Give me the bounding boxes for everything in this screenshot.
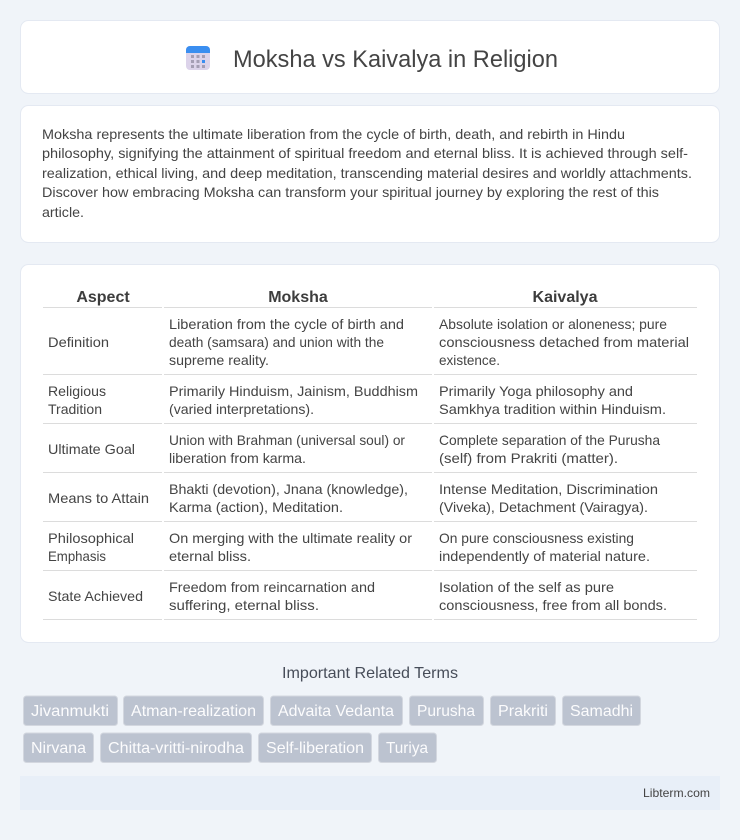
text block: introduction paragraph: Moksha represents the ultimate liberation from the cycle of birth, death, and rebirth in Hindu [42,126,625,142]
table header [76,289,598,306]
row: definition: Absolute isolation or aloneness; pure [439,316,667,332]
row: means to attain: Intense Meditation, Discrimination [439,481,658,497]
related term chips: Jivanmukti [31,703,109,720]
text block: introduction paragraph: realization, ethical living, and deep meditation, transcending material desires and worldly attachments. [42,165,692,181]
row: definition: Definition [48,334,109,350]
table header: Moksha [268,289,328,306]
text block: introduction paragraph: philosophy, signifying the attainment of spiritual freedom and eternal bliss. It is achieved through self- [42,145,688,161]
row: ultimate goal: liberation from karma. [169,450,306,466]
row: philosophical emphasis: On pure consciousness existing [439,530,634,546]
row: philosophical emphasis [48,530,650,564]
row: means to attain [48,481,658,515]
heading: important related terms: Important Related Terms [282,665,458,682]
row: definition: consciousness detached from material [439,334,689,350]
row: definition: supreme reality. [169,352,269,368]
related term chips: Chitta-vritti-nirodha [108,740,244,757]
related term chips: Nirvana [31,740,86,757]
row: ultimate goal: Ultimate Goal [48,441,135,457]
row: religious tradition: (varied interpretations). [169,401,314,417]
row: philosophical emphasis: On merging with the ultimate reality or [169,530,412,546]
row: philosophical emphasis: independently of material nature. [439,548,650,564]
text block: introduction paragraph: article. [42,204,84,220]
row: philosophical emphasis: Emphasis [48,548,106,564]
table row lines [43,308,697,620]
row: philosophical emphasis: eternal bliss. [169,548,251,564]
row: state achieved: Freedom from reincarnation and [169,579,375,595]
related term chips: Turiya [386,740,428,757]
row: definition [48,316,689,368]
row: state achieved [48,579,667,613]
related term chips: Samadhi [570,703,633,720]
footer [20,776,720,810]
row: philosophical emphasis: Philosophical [48,530,134,546]
text block: introduction paragraph: Discover how embracing Moksha can transform your spiritual journey by exploring the rest of this [42,184,659,200]
panel: comparison table [20,264,720,642]
row: means to attain: Bhakti (devotion), Jnana (knowledge), [169,481,408,497]
footer: Libterm.com [643,786,710,800]
panel: header [20,20,720,94]
table header: Aspect [76,289,130,306]
related term chips: Purusha [417,703,475,720]
icon: calendar [186,46,210,70]
row: ultimate goal: (self) from Prakriti (matter). [439,450,618,466]
row: ultimate goal: Union with Brahman (universal soul) or [169,432,405,448]
title: Moksha vs Kaivalya in Religion [233,46,558,73]
row: religious tradition: Primarily Yoga philosophy and [439,383,633,399]
row: definition: death (samsara) and union with the [169,334,384,350]
row: definition: existence. [439,352,500,368]
related term chips: Atman-realization [131,703,256,720]
row: state achieved: suffering, eternal bliss. [169,597,319,613]
row: religious tradition: Primarily Hinduism, Jainism, Buddhism [169,383,418,399]
row: religious tradition: Tradition [48,401,102,417]
row: definition: Liberation from the cycle of birth and [169,316,404,332]
row: means to attain: Karma (action), Meditation. [169,499,343,515]
row: state achieved: State Achieved [48,588,143,604]
panel: introduction [20,106,720,242]
related term chips: Prakriti [498,703,548,720]
row: means to attain: Means to Attain [48,490,149,506]
text block: introduction paragraph [42,126,692,220]
row: religious tradition: Samkhya tradition within Hinduism. [439,401,666,417]
row: ultimate goal [48,432,660,466]
row: religious tradition: Religious [48,383,106,399]
related term chips: Advaita Vedanta [278,703,394,720]
row: means to attain: (Viveka), Detachment (Vairagya). [439,499,648,515]
table header: Kaivalya [533,289,598,306]
row: state achieved: consciousness, free from all bonds. [439,597,667,613]
related term chips: Self-liberation [266,740,364,757]
row: religious tradition [48,383,666,417]
row: ultimate goal: Complete separation of the Purusha [439,432,660,448]
related term chips [24,696,640,762]
row: state achieved: Isolation of the self as pure [439,579,614,595]
